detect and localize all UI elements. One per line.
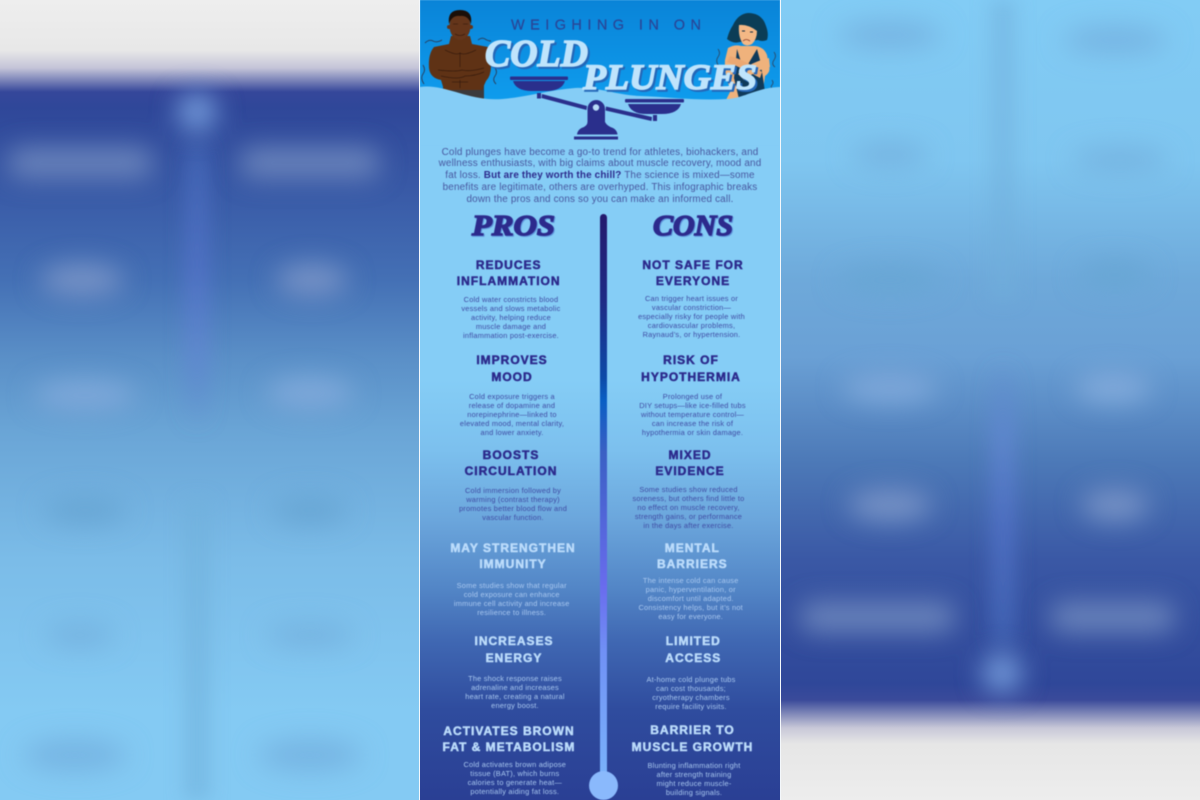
pro: reduces inflammation: vessels and slows metabolic — [461, 304, 561, 313]
pro: increases energy: heart rate, creating a natural — [465, 692, 565, 701]
con: barrier to muscle growth: MUSCLE GROWTH — [632, 740, 753, 754]
con: mixed evidence: EVIDENCE — [655, 464, 725, 478]
con: mental barriers: The intense cold can cause — [643, 576, 739, 585]
pro: activates brown fat: potentially aiding fat loss. — [470, 787, 559, 796]
con: barrier to muscle growth: after strength training — [657, 770, 731, 778]
pro: boosts circulation: BOOSTS — [483, 448, 539, 462]
con: mixed evidence: strength gains, or performance — [635, 512, 742, 521]
intro paragraph — [438, 146, 762, 204]
con: risk of hypothermia: hypothermia or skin damage. — [642, 428, 743, 437]
pro: increases energy: adrenaline and increases — [471, 683, 559, 692]
pro: reduces inflammation — [456, 258, 561, 340]
con: mixed evidence: in the days after exercise. — [643, 521, 734, 530]
con: mixed evidence: Some studies show reduced — [639, 485, 738, 494]
con: limited access: ACCESS — [665, 651, 721, 665]
pro: may strengthen immunity: IMMUNITY — [479, 557, 547, 571]
icon: shivering woman — [717, 13, 776, 100]
pro: reduces inflammation: inflammation post-exercise. — [463, 331, 559, 340]
intro paragraph: fat loss. But are they worth the chill? The science is mixed—some — [445, 170, 755, 181]
con: limited access: require facility visits. — [655, 702, 727, 711]
pro: increases energy — [465, 634, 565, 710]
pro: boosts circulation: vascular function. — [482, 513, 544, 522]
pro: increases energy: ENERGY — [486, 651, 542, 665]
pro: improves mood: and lower anxiety. — [480, 428, 543, 437]
con: not safe for everyone: vascular constriction— — [652, 303, 731, 312]
con: barrier to muscle growth — [632, 723, 753, 798]
intro paragraph: benefits are legitimate, others are overhyped. This infographic breaks — [443, 182, 757, 193]
con: mental barriers: MENTAL — [665, 541, 720, 555]
pro: boosts circulation: CIRCULATION — [465, 464, 557, 478]
con: not safe for everyone — [638, 258, 745, 339]
pro: improves mood: MOOD — [491, 370, 533, 384]
infographic panel — [420, 0, 780, 800]
con: not safe for everyone: Raynaud’s, or hypertension. — [643, 330, 740, 339]
con: barrier to muscle growth: Blunting inflammation right — [647, 760, 741, 770]
pro: activates brown fat: tissue (BAT), which burns — [470, 769, 559, 778]
pro: increases energy: energy boost. — [491, 701, 539, 710]
pro: increases energy: The shock response raises — [468, 674, 562, 683]
con: mixed evidence: MIXED — [668, 448, 712, 462]
con: mental barriers: BARRIERS — [657, 557, 728, 571]
pro: improves mood — [460, 353, 564, 437]
pro: boosts circulation: warming (contrast therapy) — [466, 495, 560, 504]
con: risk of hypothermia: HYPOTHERMIA — [641, 370, 741, 384]
con: not safe for everyone: NOT SAFE FOR — [642, 258, 744, 272]
pro: improves mood: norepinephrine—linked to — [467, 410, 557, 419]
pro: reduces inflammation: activity, helping reduce — [471, 313, 551, 322]
column headings — [470, 210, 734, 242]
column headings: CONS — [653, 210, 733, 242]
intro paragraph: wellness enthusiasts, with big claims about muscle recovery, mood and — [439, 158, 761, 169]
con: not safe for everyone: especially risky for people with — [638, 312, 745, 321]
center thermometer divider — [588, 213, 618, 800]
con: mixed evidence — [632, 448, 745, 530]
con: not safe for everyone: Can trigger heart issues or — [645, 294, 738, 303]
header illustration: characters, wave, scale and title — [420, 0, 780, 140]
pro: improves mood: Cold exposure triggers a — [469, 392, 555, 401]
pro: may strengthen immunity: Some studies show that regular — [457, 581, 567, 590]
pro: reduces inflammation: INFLAMMATION — [457, 274, 561, 288]
pro: activates brown fat — [442, 724, 575, 796]
con: not safe for everyone: cardiovascular problems, — [648, 321, 735, 330]
intro paragraph: Cold plunges have become a go-to trend for athletes, biohackers, and — [442, 146, 758, 158]
title: WEIGHING IN ON — [511, 18, 701, 34]
pro: improves mood: release of dopamine and — [469, 401, 555, 410]
pro: boosts circulation — [458, 448, 567, 522]
con: risk of hypothermia — [639, 353, 746, 438]
pro: improves mood: IMPROVES — [476, 353, 548, 367]
con: not safe for everyone: EVERYONE — [656, 274, 730, 288]
pro: reduces inflammation: muscle damage and — [476, 322, 546, 331]
title: PLUNGES — [582, 57, 757, 97]
con: mental barriers: panic, hyperventilation, or — [646, 585, 736, 594]
con: mental barriers: discomfort until adapted. — [648, 594, 734, 603]
con: risk of hypothermia: Prolonged use of — [663, 392, 722, 401]
con: barrier to muscle growth: building signals. — [666, 788, 722, 796]
con: mental barriers — [638, 541, 743, 621]
icon: balance scale — [510, 76, 684, 140]
pro: reduces inflammation: Cold water constricts blood — [464, 295, 558, 304]
pro: activates brown fat: FAT & METABOLISM — [443, 740, 575, 754]
intro paragraph: down the pros and cons so you can make an informed call. — [467, 194, 733, 204]
title — [485, 18, 757, 97]
pro: activates brown fat: calories to generate heat— — [468, 778, 562, 787]
column headings: PROS — [471, 210, 555, 242]
pro: boosts circulation: Cold immersion followed by — [465, 486, 561, 495]
con: limited access — [646, 634, 736, 711]
con: mixed evidence: no effect on muscle recovery, — [637, 503, 740, 512]
pro: may strengthen immunity: cold exposure can enhance — [464, 590, 560, 599]
pro: increases energy: INCREASES — [474, 634, 554, 648]
con: limited access: LIMITED — [666, 634, 721, 648]
pro: may strengthen immunity: resilience to illness. — [477, 608, 546, 617]
pro: may strengthen immunity: immune cell activity and increase — [454, 599, 570, 608]
pro: activates brown fat: Cold activates brown adipose — [463, 760, 566, 769]
con: barrier to muscle growth: BARRIER TO — [650, 723, 735, 737]
title: COLD — [485, 33, 588, 75]
icon: shivering man — [422, 10, 496, 99]
pro: reduces inflammation: REDUCES — [476, 258, 542, 272]
pro: may strengthen immunity: MAY STRENGTHEN — [450, 541, 576, 555]
white panel edge right — [780, 0, 781, 800]
white panel edge left — [419, 0, 420, 800]
con: risk of hypothermia: without temperature control— — [641, 410, 744, 419]
pro: improves mood: elevated mood, mental clarity, — [460, 419, 564, 428]
con: risk of hypothermia: can increase the risk of — [652, 419, 733, 428]
con: barrier to muscle growth: might reduce muscle- — [656, 778, 732, 788]
con: limited access: can cost thousands; — [656, 684, 726, 693]
pro: may strengthen immunity — [450, 541, 576, 617]
pro: boosts circulation: promotes better blood flow and — [459, 504, 567, 513]
con: mental barriers: easy for everyone. — [658, 612, 723, 621]
con: mixed evidence: soreness, but others find little to — [632, 494, 745, 503]
con: limited access: At-home cold plunge tubs — [646, 675, 736, 684]
con: limited access: cryotherapy chambers — [652, 693, 730, 702]
pro: activates brown fat: ACTIVATES BROWN — [443, 724, 575, 738]
con: risk of hypothermia: DIY setups—like ice-filled tubs — [639, 401, 746, 410]
con: risk of hypothermia: RISK OF — [663, 353, 719, 367]
wave — [420, 87, 780, 145]
con: mental barriers: Consistency helps, but it’s not — [638, 603, 743, 612]
